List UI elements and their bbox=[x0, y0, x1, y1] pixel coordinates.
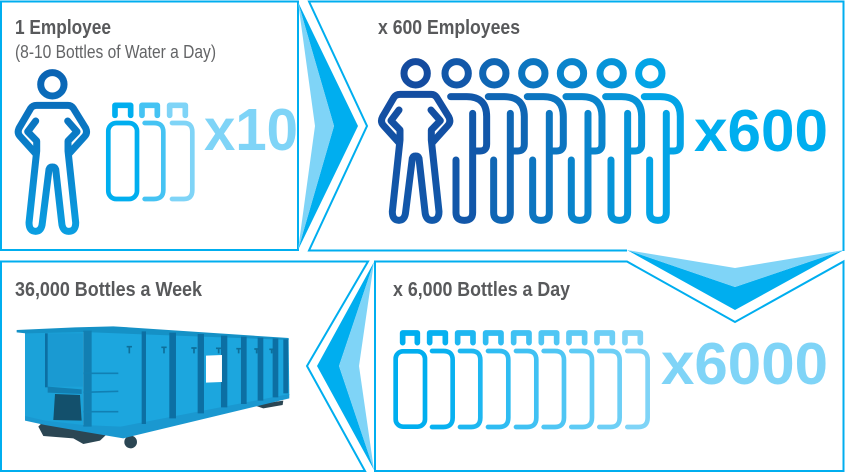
people behind bbox=[445, 62, 680, 220]
panel: one employee bbox=[1, 2, 298, 250]
icon: three bottles bbox=[108, 105, 192, 199]
front opening bbox=[53, 394, 82, 421]
arrow: right chevron bbox=[298, 2, 358, 250]
icon: row of bottles bbox=[396, 333, 648, 427]
panel outline bbox=[1, 2, 298, 250]
window cutout bbox=[206, 355, 222, 383]
remaining bottles bbox=[430, 333, 648, 427]
subheading: (8-10 Bottles of Water a Day) bbox=[15, 42, 216, 62]
heading: x 600 Employees bbox=[378, 17, 520, 39]
front recess bbox=[47, 333, 83, 387]
heading: x 6,000 Bottles a Day bbox=[393, 279, 571, 301]
multiplier x10: x10 bbox=[204, 97, 298, 163]
undercarriage and wheels bbox=[38, 401, 283, 448]
panel: bottles a week bbox=[1, 262, 368, 471]
multiplier x6000: x6000 bbox=[661, 331, 828, 397]
panel outline bbox=[1, 262, 368, 471]
ladder rungs bbox=[83, 373, 118, 412]
icon: person bbox=[18, 73, 87, 231]
ladder post and front bar bbox=[48, 331, 92, 427]
heading: 1 Employee bbox=[15, 17, 111, 39]
top lip bbox=[17, 326, 289, 340]
arrow: left chevron bbox=[317, 262, 374, 470]
vertical ribs bbox=[45, 331, 288, 424]
front wall bbox=[25, 330, 83, 427]
panel: six hundred employees bbox=[309, 2, 844, 251]
front person bbox=[381, 62, 450, 220]
panel outline bbox=[309, 2, 844, 251]
icon: row of people bbox=[381, 62, 680, 220]
arrow: down chevron bbox=[627, 250, 844, 310]
panel: six thousand bottles a day bbox=[375, 262, 844, 471]
first bottle bbox=[396, 333, 425, 427]
heading: 36,000 Bottles a Week bbox=[15, 279, 203, 301]
bottom rail bbox=[25, 394, 289, 438]
multiplier x600: x600 bbox=[694, 98, 828, 164]
panel outline bbox=[375, 262, 844, 471]
side wall bbox=[83, 330, 289, 429]
side hooks bbox=[127, 347, 274, 353]
image: blue dumpster bbox=[17, 326, 289, 448]
